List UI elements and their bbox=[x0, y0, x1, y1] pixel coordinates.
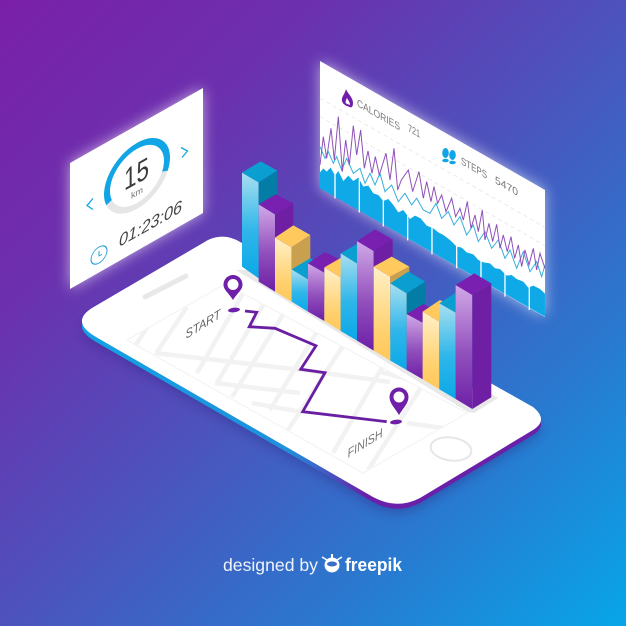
calories label: CALORIES bbox=[357, 98, 400, 134]
gauge ring bbox=[107, 129, 167, 223]
bar 1 blue bbox=[242, 161, 277, 278]
steps label: STEPS bbox=[461, 156, 487, 182]
elapsed time: 01:23:06 bbox=[119, 195, 183, 251]
bar 3 yellow bbox=[275, 225, 310, 302]
icon: flame bbox=[342, 89, 353, 108]
distance unit: km bbox=[131, 185, 143, 202]
speaker bbox=[145, 276, 186, 297]
phone bbox=[82, 237, 541, 514]
bar 6 yellow bbox=[324, 257, 357, 331]
finish label: FINISH bbox=[347, 425, 384, 461]
bar 8 purple bbox=[357, 229, 393, 351]
bar 14 purple bbox=[456, 273, 491, 409]
bar 12 yellow bbox=[423, 300, 457, 389]
icon: clock bbox=[91, 242, 107, 268]
map bbox=[127, 284, 470, 473]
distance value: 15 bbox=[124, 150, 149, 198]
calories value: 721 bbox=[408, 123, 420, 141]
bar 11 purple bbox=[407, 304, 439, 379]
bar 10 blue bbox=[390, 272, 425, 370]
finish pin bbox=[390, 388, 408, 425]
bar 9 yellow bbox=[374, 257, 409, 361]
bar chart bbox=[242, 161, 491, 409]
footer credit bbox=[223, 554, 403, 575]
panel: distance and time bbox=[70, 88, 203, 289]
freepik wordmark: freepik bbox=[345, 555, 403, 575]
bar 7 blue bbox=[341, 244, 373, 341]
bar 4 blue bbox=[292, 258, 327, 312]
start label: START bbox=[185, 306, 222, 342]
icon: steps bbox=[442, 148, 456, 164]
icon: freepik mascot bbox=[322, 554, 342, 572]
next arrow bbox=[181, 148, 188, 158]
designed by text: designed by bbox=[223, 555, 318, 575]
route line bbox=[245, 311, 387, 422]
line chart bbox=[320, 98, 545, 317]
bar 5 purple bbox=[308, 252, 341, 321]
bar 13 blue bbox=[439, 293, 473, 399]
previous arrow bbox=[87, 198, 93, 210]
start pin bbox=[224, 275, 242, 313]
bar base shadow bbox=[236, 270, 498, 413]
bar 2 purple bbox=[259, 194, 293, 292]
steps value: 5470 bbox=[495, 175, 518, 199]
panel: calories and steps chart bbox=[320, 61, 545, 317]
home button bbox=[429, 435, 473, 463]
